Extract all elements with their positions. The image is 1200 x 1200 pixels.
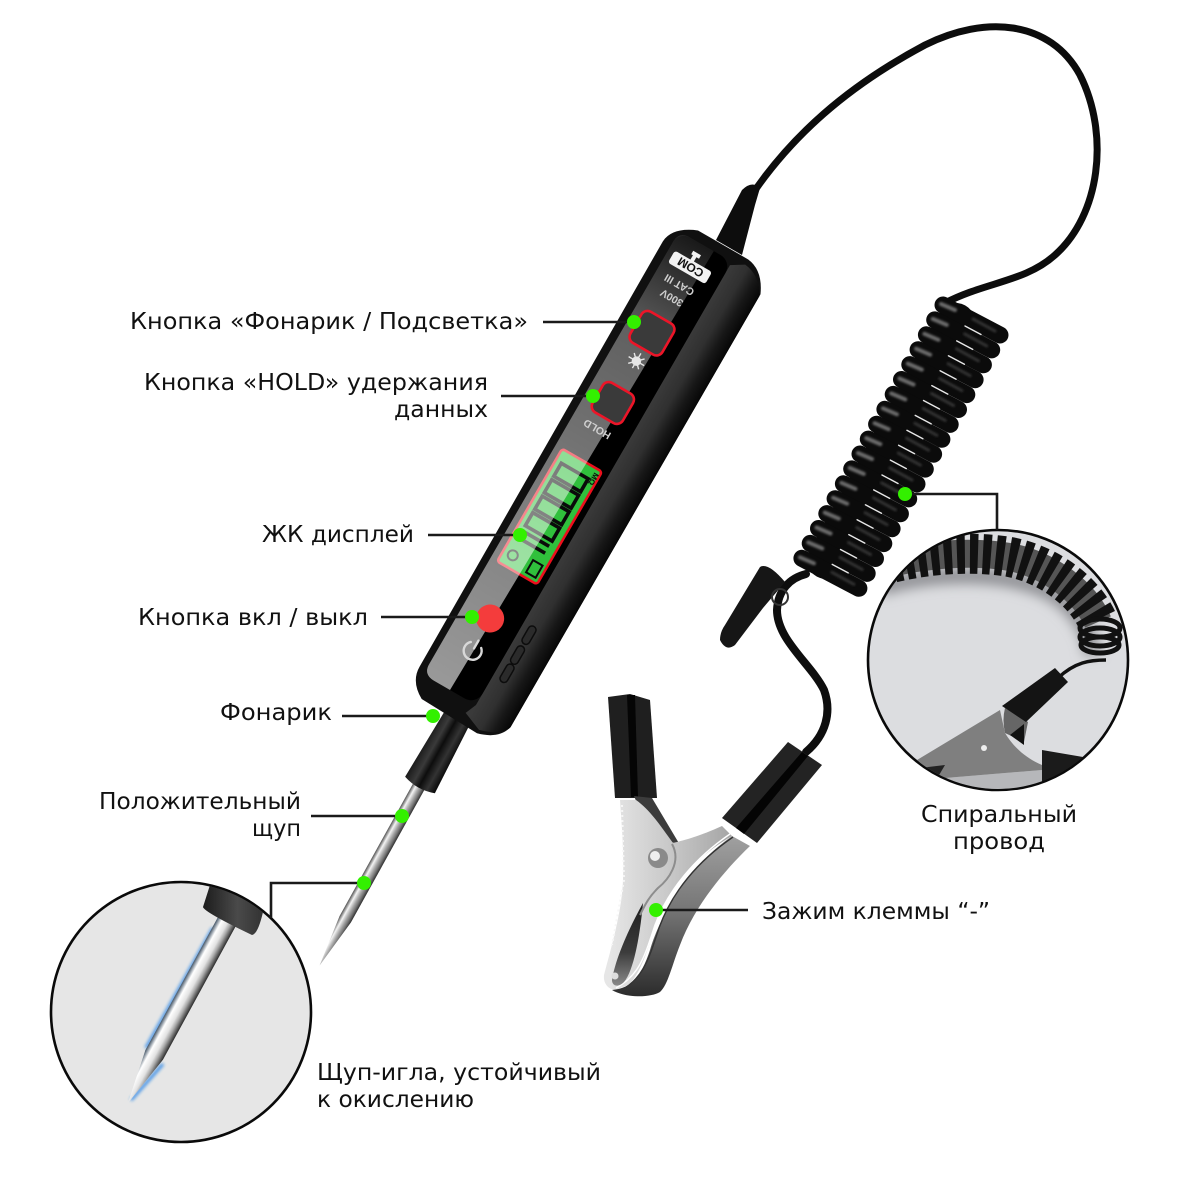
clamp rivet — [981, 745, 987, 751]
LCD unit label: MΩ — [586, 471, 600, 487]
marker — [586, 389, 600, 403]
label line 1: Спиральный — [921, 802, 1077, 828]
callout: needle tip — [271, 876, 601, 1113]
HOLD text: HOLD — [581, 416, 613, 441]
blue glow — [131, 928, 213, 1100]
label: ЖК дисплей — [262, 522, 414, 548]
COM symbol tab — [688, 251, 701, 264]
label: Фонарик — [220, 700, 332, 726]
COM label — [668, 243, 717, 284]
LCD frame — [497, 449, 602, 584]
jaw edge line — [620, 837, 733, 991]
probe sleeve — [404, 705, 475, 796]
dark jaw piece — [1042, 750, 1083, 781]
label: Кнопка вкл / выкл — [138, 605, 368, 631]
small plug cap — [720, 566, 788, 648]
callout: positive probe — [99, 789, 409, 842]
pivot — [648, 848, 668, 868]
marker — [898, 487, 912, 501]
pivot highlight — [650, 851, 660, 861]
leader line — [543, 321, 634, 323]
COM plate — [668, 251, 712, 284]
marker — [465, 610, 479, 624]
jaw slot — [612, 903, 643, 986]
leader line — [656, 909, 748, 911]
marker — [627, 315, 641, 329]
left dark wedge — [926, 765, 945, 775]
marker — [513, 528, 527, 542]
serrated edge — [612, 805, 624, 945]
LCD hold box — [526, 560, 543, 578]
negative lead to clamp — [777, 574, 827, 752]
clamp plate lower — [946, 770, 1042, 789]
inset: needle probe — [51, 870, 311, 1142]
left sleeve — [608, 694, 657, 798]
glossy reflection — [423, 231, 714, 695]
dark jaw — [612, 836, 750, 996]
callout: hold button — [144, 370, 600, 423]
left sleeve ridge — [627, 695, 638, 797]
upper dark lever — [634, 796, 680, 845]
label line 2: щуп — [252, 816, 301, 842]
callout: flashlight button — [130, 309, 641, 335]
inset coil solid core — [880, 554, 1098, 622]
label line 2: данных — [394, 397, 488, 423]
pivot ridge — [640, 844, 675, 915]
inset coil loops — [880, 554, 1098, 622]
inset disc — [868, 530, 1128, 790]
right sleeve — [722, 742, 822, 843]
COM text: COM — [675, 254, 706, 280]
clamp sleeve top — [1002, 668, 1068, 722]
callout: power button — [138, 605, 479, 631]
probe cable from tester to coil — [745, 27, 1097, 303]
rating text: CAT III — [662, 271, 697, 298]
label line 1: Кнопка «HOLD» удержания — [144, 370, 488, 396]
silver plate — [604, 800, 732, 990]
voltage text: 300V — [658, 286, 686, 309]
leader line — [271, 883, 364, 918]
leader line — [381, 616, 472, 618]
positive probe — [314, 705, 475, 969]
enlarged sleeve cap — [203, 886, 263, 935]
flashlight icon — [625, 349, 649, 373]
label line 1: Щуп-игла, устойчивый — [317, 1060, 601, 1086]
clamp sleeve opening — [1004, 708, 1028, 742]
LCD digits — [518, 463, 588, 553]
inset disc — [51, 882, 311, 1142]
tester body — [403, 218, 772, 746]
label: Зажим клеммы “-” — [762, 899, 990, 925]
label line 1: Положительный — [99, 789, 301, 815]
label line 2: к окислению — [317, 1087, 474, 1113]
leader line — [501, 395, 593, 397]
face plate — [423, 231, 732, 705]
LCD display — [497, 449, 602, 585]
clamp plate — [917, 710, 1042, 778]
marker — [357, 876, 371, 890]
power button — [471, 599, 509, 638]
right sleeve ridge — [736, 752, 808, 834]
body shell — [403, 218, 772, 746]
leader line — [342, 715, 433, 717]
coil backing — [826, 322, 956, 560]
inset contents — [880, 554, 1120, 800]
leader line — [428, 534, 520, 536]
coil loops — [800, 304, 1000, 588]
enlarged needle — [128, 918, 236, 1102]
plug body — [720, 566, 785, 648]
inset: coil and clamp — [868, 530, 1128, 800]
crocodile clamp — [604, 694, 822, 996]
clamp sleeve inner — [1010, 724, 1024, 745]
callout: LCD — [262, 522, 527, 548]
ring — [772, 589, 788, 605]
inset cable — [1058, 660, 1106, 678]
coil shadow — [880, 576, 1092, 655]
label: Кнопка «Фонарик / Подсветка» — [130, 309, 528, 335]
needle — [314, 778, 428, 969]
leader line — [311, 815, 402, 817]
jaw highlight — [616, 834, 730, 988]
hold button — [589, 379, 636, 426]
power icon — [460, 636, 486, 663]
spiral coil cable — [800, 304, 1000, 588]
callout: spiral cable — [898, 487, 1077, 855]
inset contents — [128, 886, 263, 1103]
marker — [649, 903, 663, 917]
marker — [395, 809, 409, 823]
flashlight button — [627, 308, 677, 358]
marker — [426, 709, 440, 723]
leader line — [905, 494, 997, 530]
grip ridges — [499, 625, 537, 684]
LCD clock — [506, 549, 520, 562]
label line 2: провод — [953, 829, 1045, 855]
inset end rings — [1080, 619, 1120, 653]
strain relief — [716, 184, 760, 255]
rivet — [612, 972, 618, 980]
side band — [462, 256, 769, 743]
callout: flashlight — [220, 700, 440, 726]
coil light slits — [832, 326, 981, 573]
callout: clamp — [649, 899, 990, 925]
